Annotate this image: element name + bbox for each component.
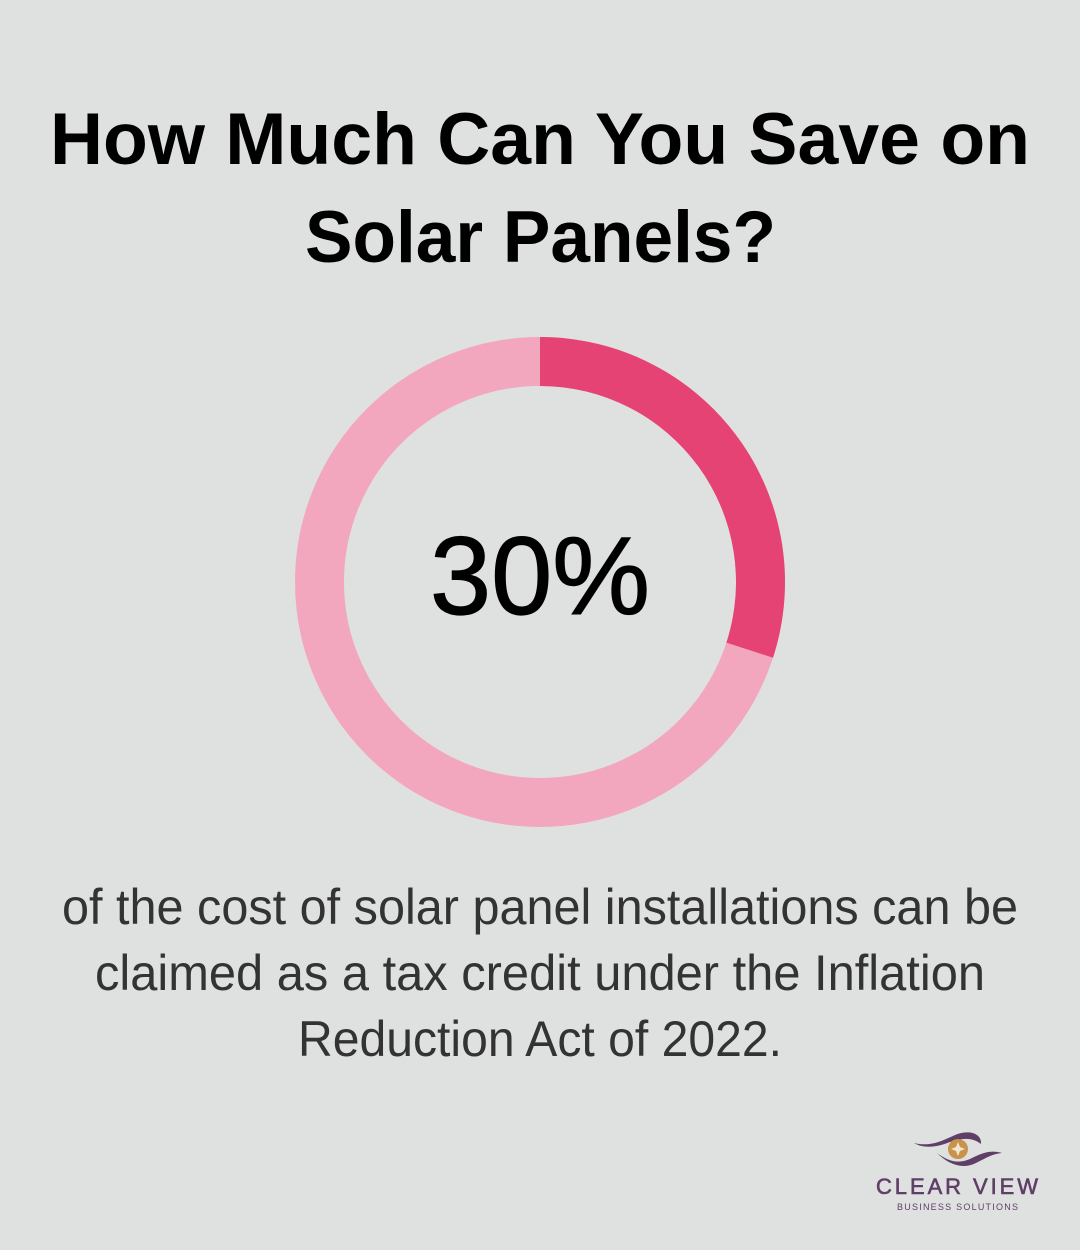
description text	[62, 879, 1018, 1067]
description text: of the cost of solar panel installations can be	[62, 879, 1018, 935]
title: Solar Panels?	[305, 197, 776, 278]
description text: claimed as a tax credit under the Inflation	[95, 945, 985, 1001]
title: How Much Can You Save on	[50, 99, 1030, 180]
description text: Reduction Act of 2022.	[298, 1011, 782, 1067]
big number: 30%	[430, 515, 650, 638]
logo tagline: BUSINESS SOLUTIONS	[897, 1202, 1018, 1212]
logo: Clear View Business Solutions	[876, 1132, 1038, 1212]
donut chart: 30 percent	[320, 337, 785, 802]
title	[50, 99, 1030, 278]
icon: eye	[914, 1132, 1002, 1166]
logo wordmark: CLEAR VIEW	[876, 1174, 1038, 1199]
